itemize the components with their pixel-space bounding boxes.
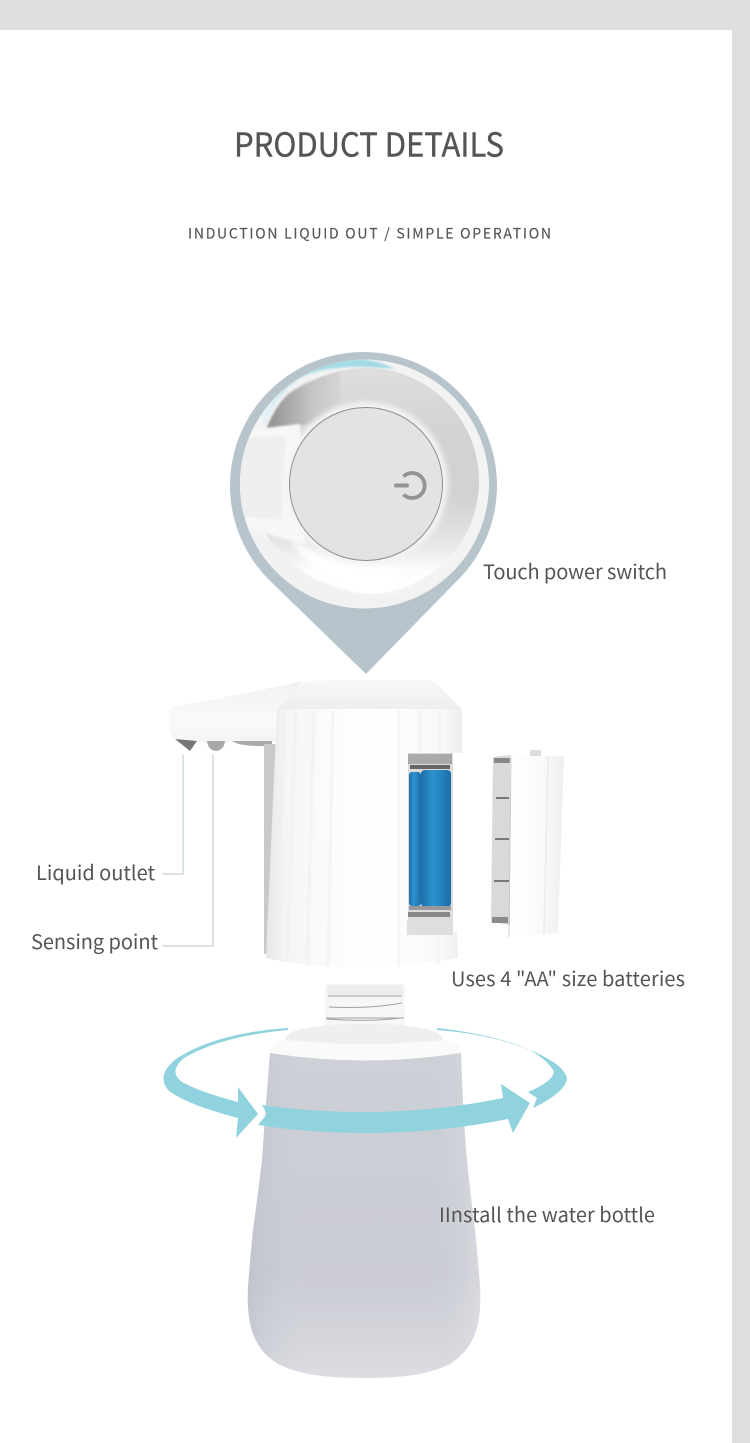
body ribs xyxy=(275,710,440,967)
rotation arrow xyxy=(164,1028,567,1138)
bottle body xyxy=(248,1053,480,1378)
touch button xyxy=(284,402,448,566)
arrow left segment xyxy=(164,1028,288,1138)
main body xyxy=(266,709,462,967)
battery compartment xyxy=(407,753,453,935)
label: liquid outlet: Liquid outlet xyxy=(36,857,155,886)
magnifier lens xyxy=(236,358,490,610)
subtitle: INDUCTION LIQUID OUT / SIMPLE OPERATION xyxy=(188,224,551,244)
arrow right segment xyxy=(437,1028,567,1108)
leader line: sensing point xyxy=(162,755,213,946)
arrow front segment xyxy=(258,1084,530,1133)
dome cap xyxy=(277,680,462,709)
battery door xyxy=(491,750,564,937)
door tab xyxy=(530,750,541,756)
outlet nozzle xyxy=(175,739,197,751)
leader line: liquid outlet xyxy=(162,755,183,874)
spout xyxy=(169,681,303,742)
bottle shading xyxy=(248,1053,480,1378)
magnifier pin xyxy=(230,352,497,674)
sensor xyxy=(207,741,225,751)
label: touch power switch: Touch power switch xyxy=(483,556,667,585)
bottle collar xyxy=(270,1040,461,1062)
label: install bottle: IInstall the water bottle xyxy=(439,1199,655,1228)
inner column xyxy=(264,744,280,954)
door inner xyxy=(491,755,510,925)
threaded neck xyxy=(325,984,405,1040)
label: sensing point: Sensing point xyxy=(31,926,158,955)
bottle xyxy=(164,984,567,1378)
door outer xyxy=(510,756,564,937)
dispenser head xyxy=(169,680,462,967)
battery front xyxy=(421,770,451,907)
label: batteries: Uses 4 "AA" size batteries xyxy=(451,963,685,992)
callout: touch power switch magnifier xyxy=(230,352,497,674)
shoulder disc xyxy=(285,1024,443,1050)
icon: power symbol xyxy=(396,473,425,498)
battery rear xyxy=(409,772,421,906)
title: PRODUCT DETAILS xyxy=(234,118,504,166)
